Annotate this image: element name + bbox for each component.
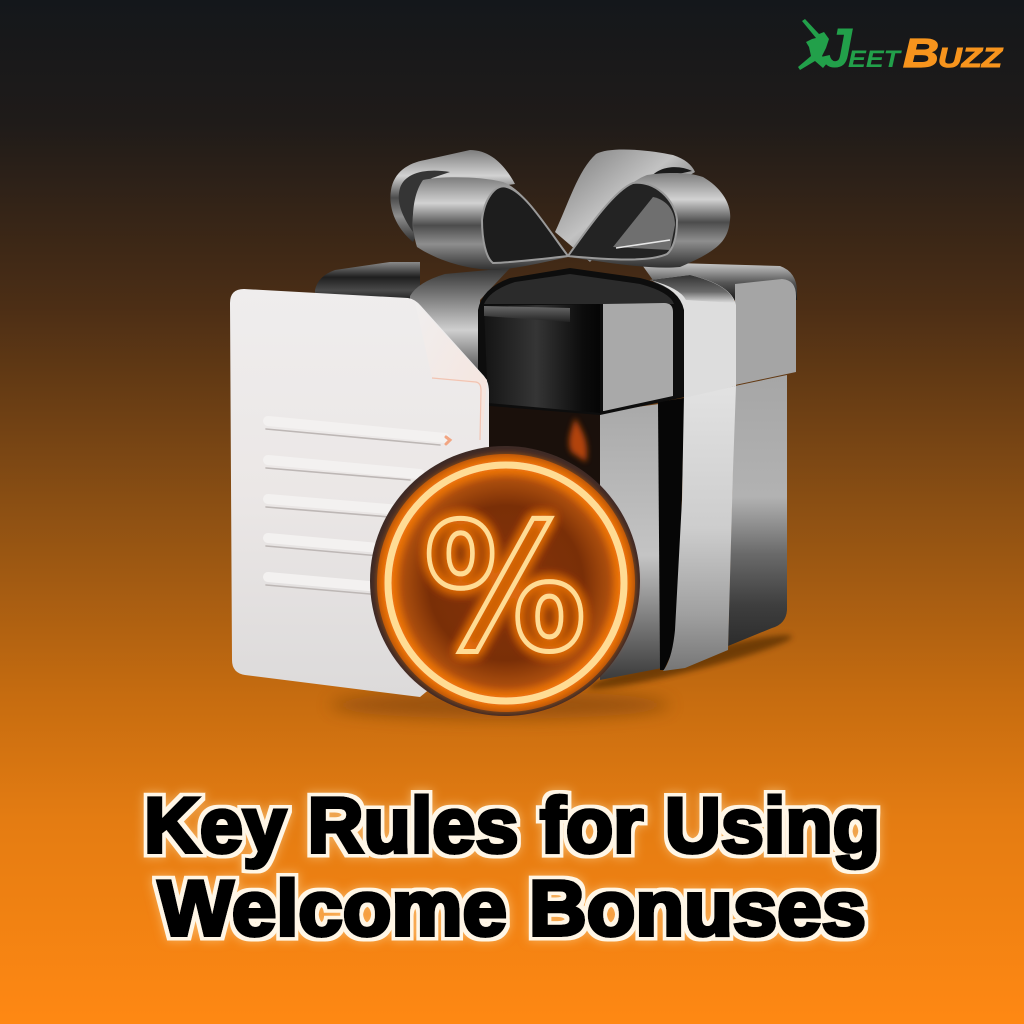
ribbon across lid (650, 275, 736, 398)
icon: neon percent coin (370, 446, 640, 716)
title (144, 781, 880, 952)
page fold (415, 302, 487, 440)
icon: gift box (315, 149, 797, 680)
neon percent sign: % (424, 486, 586, 691)
title: Welcome Bonuses (158, 864, 866, 952)
logo: JeetBuzz (798, 16, 1003, 79)
dark lid corner (478, 268, 685, 415)
icon: cricket player (798, 19, 829, 70)
front bow loops (413, 173, 730, 270)
wordmark: B: B (903, 30, 939, 76)
wordmark: Jeet: J (822, 16, 854, 79)
box lid (315, 262, 797, 415)
lid front face (484, 304, 600, 413)
wordmark: eet: EET (848, 46, 903, 73)
box body (488, 375, 787, 680)
neon ring (388, 465, 624, 701)
back bow loops (390, 149, 695, 262)
floor shadows (330, 628, 794, 719)
wordmark: uzz: UZZ (938, 42, 1003, 73)
lid right face (603, 303, 673, 411)
title: Key Rules for Using (144, 781, 880, 869)
page text lines (266, 421, 450, 594)
lid top left band (315, 262, 420, 300)
icon: document page (230, 289, 489, 697)
lid top right (640, 262, 797, 300)
left strap (410, 268, 510, 406)
